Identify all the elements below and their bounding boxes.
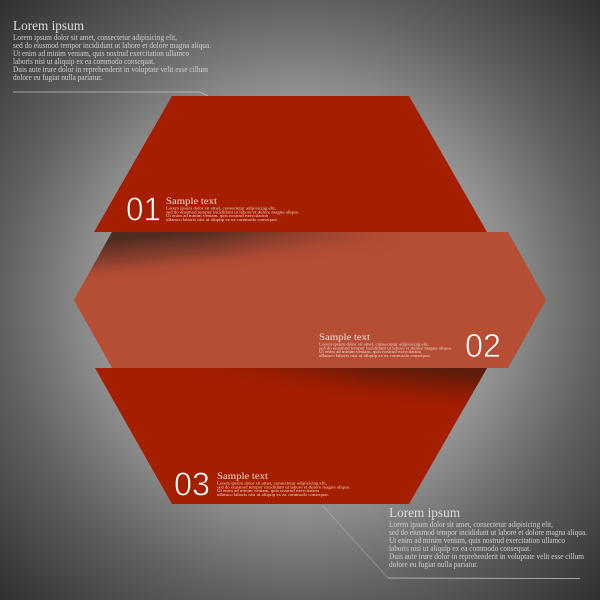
heading: bottom Lorem ipsum: Lorem ipsum <box>389 505 460 520</box>
sample text 02: sed do eiusmod tempor incididunt ut labore et dolore magna aliqua. <box>319 346 452 350</box>
sample text 01: Ut enim ad minim veniam, quis nostrud exercitation <box>166 213 269 219</box>
number 01: 01 <box>126 190 161 228</box>
text block: top paragraph: dolore eu fugiat nulla pariatur. <box>13 73 102 82</box>
sample text 03: Lorem ipsum dolor sit amet, consectetur adipisicing elit, <box>217 480 327 486</box>
heading: top Lorem ipsum: Lorem ipsum <box>13 18 84 33</box>
panel: segment 01 <box>94 96 487 232</box>
text block: bottom paragraph: Lorem ipsum dolor sit amet, consectetur adipisicing elit, <box>389 520 553 529</box>
sample text 01 <box>166 206 299 222</box>
text block: top paragraph <box>13 33 211 82</box>
sample text 02: ullamco laboris nisi ut aliquip ex ea commodo consequat. <box>319 353 431 358</box>
sample text 03 <box>217 480 350 497</box>
callout line: top <box>13 92 208 96</box>
text block: top paragraph: Lorem ipsum dolor sit amet, consectetur adipisicing elit, <box>13 33 177 42</box>
callout line: bottom <box>322 505 580 578</box>
panel: segment 02 <box>74 232 546 368</box>
panel: bottom text block <box>389 505 587 569</box>
text block: bottom paragraph: Duis aute irure dolor in reprehenderit in voluptate velit esse cillum <box>389 552 585 561</box>
shape: bottom trapezoid <box>95 368 487 504</box>
sample heading 02: Sample text <box>319 332 370 343</box>
text block: bottom paragraph: sed do eiusmod tempor incididunt ut labore et dolore magna aliqua. <box>389 528 587 537</box>
text block: top paragraph: laboris nisi ut aliquip ex ea commodo consequat. <box>13 57 155 66</box>
text block: bottom paragraph: laboris nisi ut aliquip ex ea commodo consequat. <box>389 544 531 553</box>
text block: bottom paragraph <box>389 520 587 569</box>
sample text 03: Ut enim ad minim veniam, quis nostrud exercitation <box>217 488 320 494</box>
panel: top text block <box>13 18 211 82</box>
shadow: bottom top <box>235 368 487 404</box>
sample text 01: ullamco laboris nisi ut aliquip ex ea commodo consequat. <box>166 217 278 222</box>
sample text 01: Lorem ipsum dolor sit amet, consectetur adipisicing elit, <box>166 206 276 212</box>
text block: bottom paragraph: dolore eu fugiat nulla pariatur. <box>389 560 478 569</box>
sample heading 03: Sample text <box>217 471 268 482</box>
sample text 03: sed do eiusmod tempor incididunt ut labore et dolore magna aliqua. <box>217 484 350 490</box>
text block: bottom paragraph: Ut enim ad minim veniam, quis nostrud exercitation ullamco <box>389 536 565 545</box>
number 03: 03 <box>174 466 210 502</box>
text block: top paragraph: Ut enim ad minim veniam, quis nostrud exercitation ullamco <box>13 49 189 58</box>
sample text 01: sed do eiusmod tempor incididunt ut labore et dolore magna aliqua. <box>166 210 299 214</box>
text block: top paragraph: Duis aute irure dolor in reprehenderit in voluptate velit esse cillum <box>13 65 209 74</box>
text block: top paragraph: sed do eiusmod tempor incididunt ut labore et dolore magna aliqua. <box>13 41 211 50</box>
shadow: middle top <box>88 232 372 274</box>
shape: middle hexagon <box>74 232 546 368</box>
sample text 02 <box>319 342 452 358</box>
sample text 03: ullamco laboris nisi ut aliquip ex ea commodo consequat. <box>217 492 329 497</box>
sample text 02: Ut enim ad minim veniam, quis nostrud exercitation <box>319 349 422 355</box>
panel: segment 03 <box>95 368 490 504</box>
sample text 02: Lorem ipsum dolor sit amet, consectetur adipisicing elit, <box>319 342 429 348</box>
number 02: 02 <box>465 327 501 364</box>
sample heading 01: Sample text <box>166 196 217 207</box>
shape: top trapezoid <box>94 96 487 232</box>
